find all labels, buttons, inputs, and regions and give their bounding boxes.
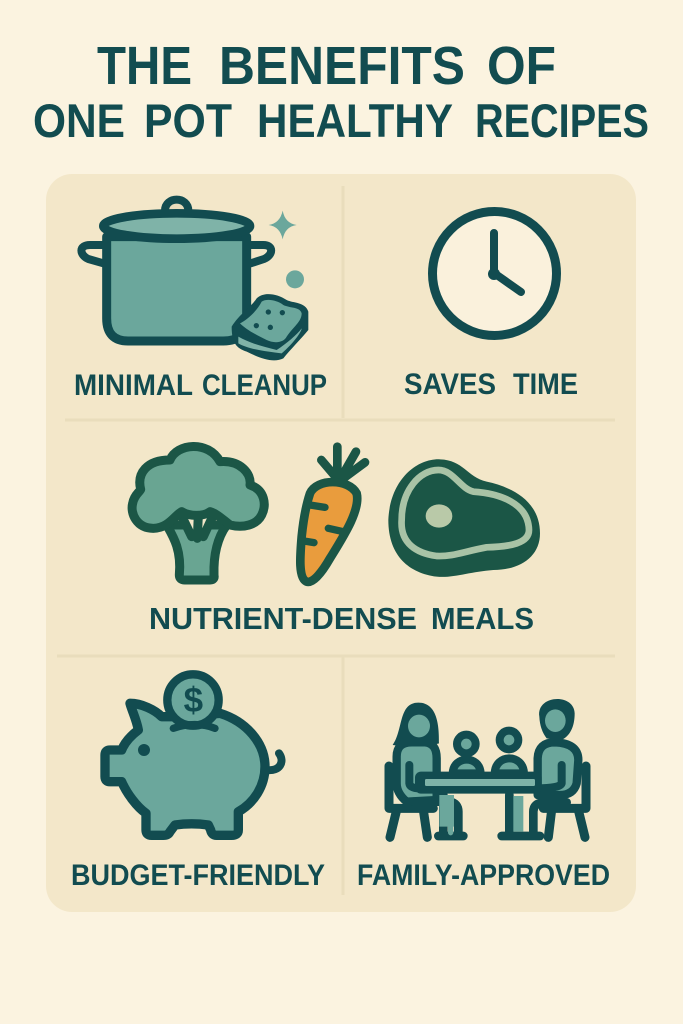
label: nutrient-dense meals: NUTRIENT-DENSE <box>149 601 417 636</box>
title: POT <box>144 94 232 147</box>
label: saves time: TIME <box>513 368 578 401</box>
title: RECIPES <box>475 94 649 147</box>
title: ONE <box>33 94 125 147</box>
chairs <box>389 766 586 837</box>
father <box>502 699 578 836</box>
icon: clock <box>432 212 556 336</box>
icon: cooking pot with sponge <box>81 200 308 360</box>
label: saves time <box>404 368 578 401</box>
label: minimal cleanup: CLEANUP <box>202 369 327 402</box>
title: BENEFITS <box>219 36 465 96</box>
title <box>33 36 649 147</box>
icon: family at table <box>389 699 586 837</box>
mother <box>393 703 463 836</box>
title: OF <box>487 36 556 96</box>
children <box>453 731 524 773</box>
icons: broccoli, carrot, meat <box>132 446 540 582</box>
title: HEALTHY <box>257 94 453 147</box>
icon: piggy bank with coin <box>105 674 282 835</box>
label: minimal cleanup: MINIMAL <box>74 369 193 402</box>
panel: benefits grid <box>46 174 636 912</box>
title: THE <box>97 36 192 96</box>
label: minimal cleanup <box>74 369 327 402</box>
icon: meat steak <box>388 459 540 577</box>
label: nutrient-dense meals: MEALS <box>431 601 534 636</box>
icon: carrot <box>300 447 365 582</box>
label: family-approved: FAMILY-APPROVED <box>357 859 610 892</box>
table <box>415 772 542 794</box>
label: saves time: SAVES <box>404 368 496 401</box>
icon: broccoli <box>132 446 264 580</box>
icon: piggy bank with coin: $ <box>184 681 203 720</box>
label: budget-friendly: BUDGET-FRIENDLY <box>71 859 325 892</box>
